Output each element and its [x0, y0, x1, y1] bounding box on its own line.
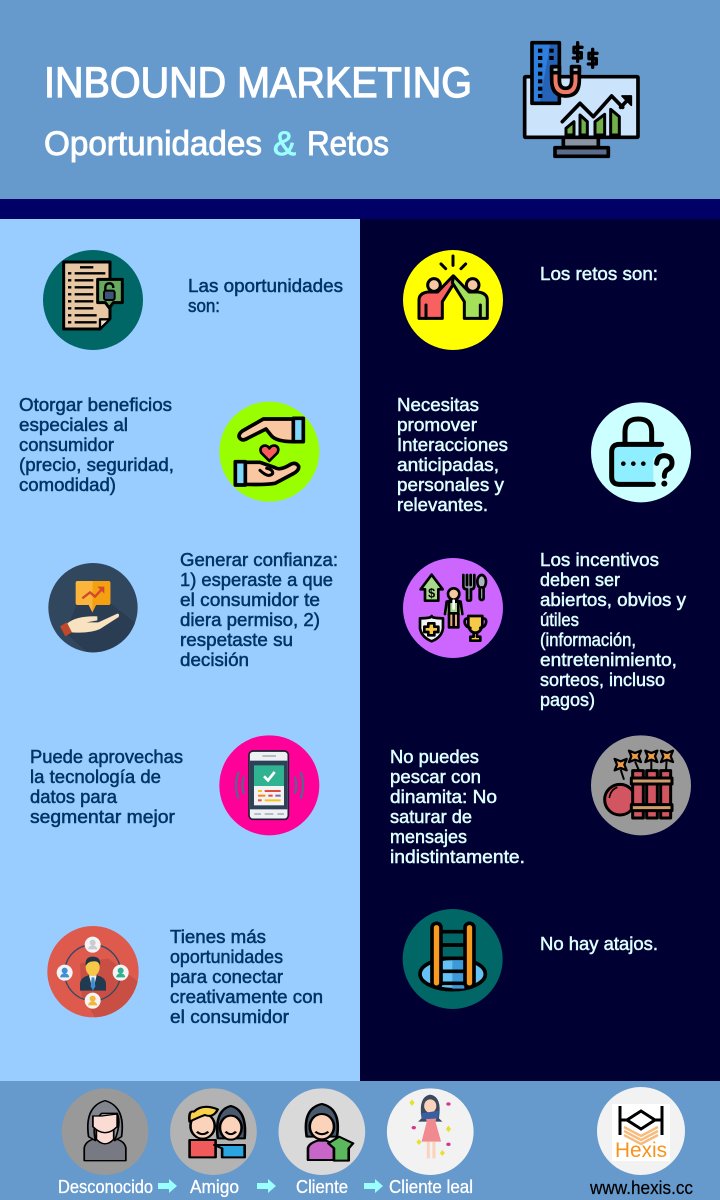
text: aprovechar tecnologia [30, 746, 183, 827]
text: tienes mas oportunidades: oportunidades [170, 946, 283, 967]
icon: incentives: $ [428, 586, 435, 600]
text: tienes mas oportunidades: Tienes más [170, 926, 266, 947]
icon: document with lock [43, 250, 143, 350]
text: no puedes pescar: mensajes [390, 826, 467, 847]
text: necesitas promover [397, 394, 508, 515]
text: tienes mas oportunidades: para conectar [170, 966, 283, 987]
text: necesitas promover: promover [397, 414, 477, 435]
text: no puedes pescar [390, 746, 525, 867]
text: los incentivos: abiertos, obvios y [540, 589, 687, 610]
subtitle: Retos [307, 125, 389, 163]
panel: retos [390, 250, 691, 1009]
text: las oportunidades [188, 275, 343, 316]
icon: cliente [278, 1088, 365, 1175]
label: amigo: Amigo [190, 1177, 239, 1197]
text: necesitas promover: Interacciones [397, 434, 508, 455]
website url: www.hexis.cc [589, 1178, 693, 1198]
text: generar confianza: diera permiso, 2) [180, 609, 320, 630]
icon: cliente leal [387, 1088, 474, 1175]
text: no hay atajos: No hay atajos. [540, 933, 658, 954]
text: otorgar beneficios: comodidad) [19, 474, 116, 495]
text: las oportunidades: son: [188, 295, 220, 316]
icon: person network [47, 926, 140, 1020]
text: otorgar beneficios: (precio, seguridad, [19, 454, 174, 475]
icon: hands and heart [219, 402, 319, 502]
text: no puedes pescar: saturar de [390, 806, 472, 827]
text: los incentivos: deben ser [540, 569, 620, 590]
text: otorgar beneficios [19, 394, 174, 495]
icon: bomb and dynamite [591, 735, 691, 835]
panel: footer customer journey [58, 1087, 693, 1198]
logo: hexis [597, 1087, 685, 1175]
text: los incentivos: entretenimiento, [540, 649, 677, 670]
text: necesitas promover: personales y [397, 474, 505, 495]
icon: monitor with magnet and chart [525, 43, 638, 156]
text: generar confianza: 1) esperaste a que [180, 569, 333, 590]
icon: ladder in hole [403, 909, 503, 1009]
text: no puedes pescar: pescar con [390, 766, 481, 787]
arrow [158, 1179, 177, 1193]
label: cliente: Cliente [296, 1177, 348, 1197]
text: no puedes pescar: dinamita: No [390, 786, 497, 807]
text: tienes mas oportunidades: creativamente con [170, 986, 323, 1007]
icon: amigo [170, 1088, 257, 1175]
panel: oportunidades background [0, 219, 360, 1081]
title: INBOUND MARKETING [44, 59, 472, 107]
label: cliente leal: Cliente leal [389, 1177, 473, 1197]
text: los incentivos: pagos) [540, 689, 595, 710]
text: tienes mas oportunidades [170, 926, 323, 1027]
text: necesitas promover: relevantes. [397, 494, 488, 515]
text: generar confianza [180, 549, 338, 670]
text: generar confianza: el consumidor te [180, 589, 320, 610]
icon: hand with chart bubble [48, 563, 140, 655]
text: otorgar beneficios: especiales al [19, 414, 128, 435]
icon: desconocido [62, 1088, 148, 1175]
text: generar confianza: decisión [180, 649, 249, 670]
text: los incentivos: útiles [540, 609, 579, 630]
label: desconocido: Desconocido [58, 1177, 153, 1197]
text: los retos son: Los retos son: [540, 263, 658, 284]
logo: hexis: Hexis [615, 1139, 667, 1162]
icon: incentives [403, 558, 503, 658]
text: los incentivos: Los incentivos [540, 549, 659, 570]
subtitle: Oportunidades [44, 125, 262, 163]
text: no puedes pescar: No puedes [390, 746, 479, 767]
header band [0, 0, 720, 199]
icon: smartphone [219, 735, 319, 835]
text: los incentivos: sorteos, incluso [540, 669, 665, 690]
text: generar confianza: respetaste su [180, 629, 293, 650]
icon: high five [403, 250, 503, 350]
text: otorgar beneficios: Otorgar beneficios [19, 394, 172, 415]
panel: retos background [360, 219, 720, 1081]
text: aprovechar tecnologia: la tecnología de [30, 766, 161, 787]
arrow [364, 1179, 383, 1193]
text: tienes mas oportunidades: el consumidor [170, 1006, 289, 1027]
arrow [257, 1179, 276, 1193]
text: los incentivos: (información, [540, 629, 636, 650]
text: las oportunidades: Las oportunidades [188, 275, 343, 296]
panel: oportunidades [19, 250, 343, 1027]
icon: padlock with question mark [591, 402, 691, 502]
footer band [0, 1081, 720, 1200]
subtitle: & [273, 125, 296, 163]
text: aprovechar tecnologia: datos para [30, 786, 118, 807]
text: necesitas promover: anticipadas, [397, 454, 499, 475]
subtitle [44, 125, 389, 163]
text: necesitas promover: Necesitas [397, 394, 479, 415]
text: aprovechar tecnologia: segmentar mejor [30, 806, 175, 827]
text: otorgar beneficios: consumidor [19, 434, 114, 455]
text: aprovechar tecnologia: Puede aprovechas [30, 746, 183, 767]
text: generar confianza: Generar confianza: [180, 549, 338, 570]
text: los incentivos [540, 549, 687, 710]
text: no puedes pescar: indistintamente. [390, 846, 525, 867]
